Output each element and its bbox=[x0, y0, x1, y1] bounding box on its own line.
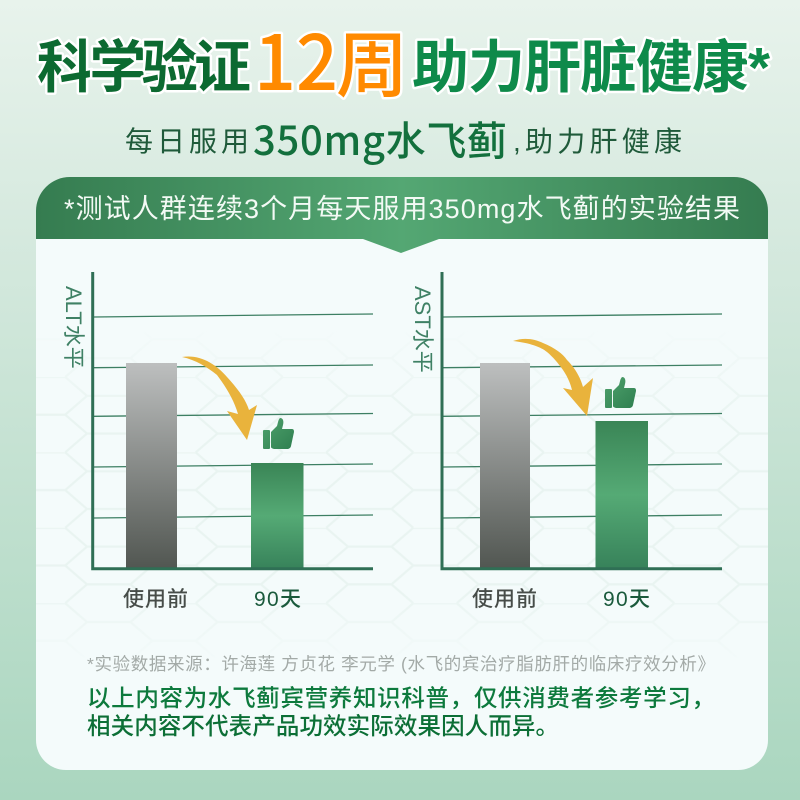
bar: before bbox=[126, 363, 177, 569]
arrow bbox=[182, 356, 257, 440]
title: 12 bbox=[254, 2, 338, 112]
chart: AST bbox=[410, 272, 722, 611]
disclaimer bbox=[87, 685, 715, 739]
panel body bbox=[36, 220, 768, 770]
gridlines bbox=[443, 314, 722, 518]
source note: *实验数据来源：许海莲 方贞花 李元学 (水飞的宾治疗脂肪肝的临床疗效分析》 bbox=[87, 654, 715, 674]
bar: before bbox=[480, 363, 530, 569]
subtitle: 每日服用 bbox=[125, 126, 249, 157]
chart: ALT bbox=[61, 272, 373, 611]
title: 科学验证 bbox=[37, 36, 251, 100]
label: 90 days: 90天 bbox=[254, 588, 301, 611]
title bbox=[37, 2, 771, 112]
arrow bbox=[513, 339, 593, 416]
panel: results bbox=[36, 177, 768, 770]
gridlines bbox=[94, 314, 373, 518]
bar: 90 days bbox=[596, 421, 648, 569]
hexagon texture bbox=[36, 386, 768, 610]
subtitle bbox=[125, 109, 682, 167]
bar: 90 days bbox=[251, 463, 304, 569]
subtitle: ,助力肝健康 bbox=[513, 126, 682, 157]
subtitle: 350mg水飞蓟 bbox=[253, 109, 507, 167]
y axis label: AST水平 bbox=[410, 286, 435, 373]
header caption: *测试人群连续3个月每天服用350mg水飞蓟的实验结果 bbox=[64, 194, 740, 224]
y axis label: ALT水平 bbox=[61, 286, 86, 369]
icon: thumbs up bbox=[263, 418, 294, 449]
disclaimer: 相关内容不代表产品功效实际效果因人而异。 bbox=[87, 713, 559, 739]
label: before: 使用前 bbox=[472, 588, 537, 611]
icon: thumbs up bbox=[605, 377, 636, 408]
axes bbox=[442, 272, 722, 569]
panel header bbox=[36, 177, 768, 253]
label: before: 使用前 bbox=[123, 588, 188, 611]
title: 周 bbox=[336, 7, 408, 112]
label: 90 days: 90天 bbox=[603, 588, 650, 611]
title: 助力肝脏健康* bbox=[412, 36, 771, 100]
disclaimer: 以上内容为水飞蓟宾营养知识科普，仅供消费者参考学习， bbox=[87, 685, 715, 711]
axes bbox=[93, 272, 373, 569]
